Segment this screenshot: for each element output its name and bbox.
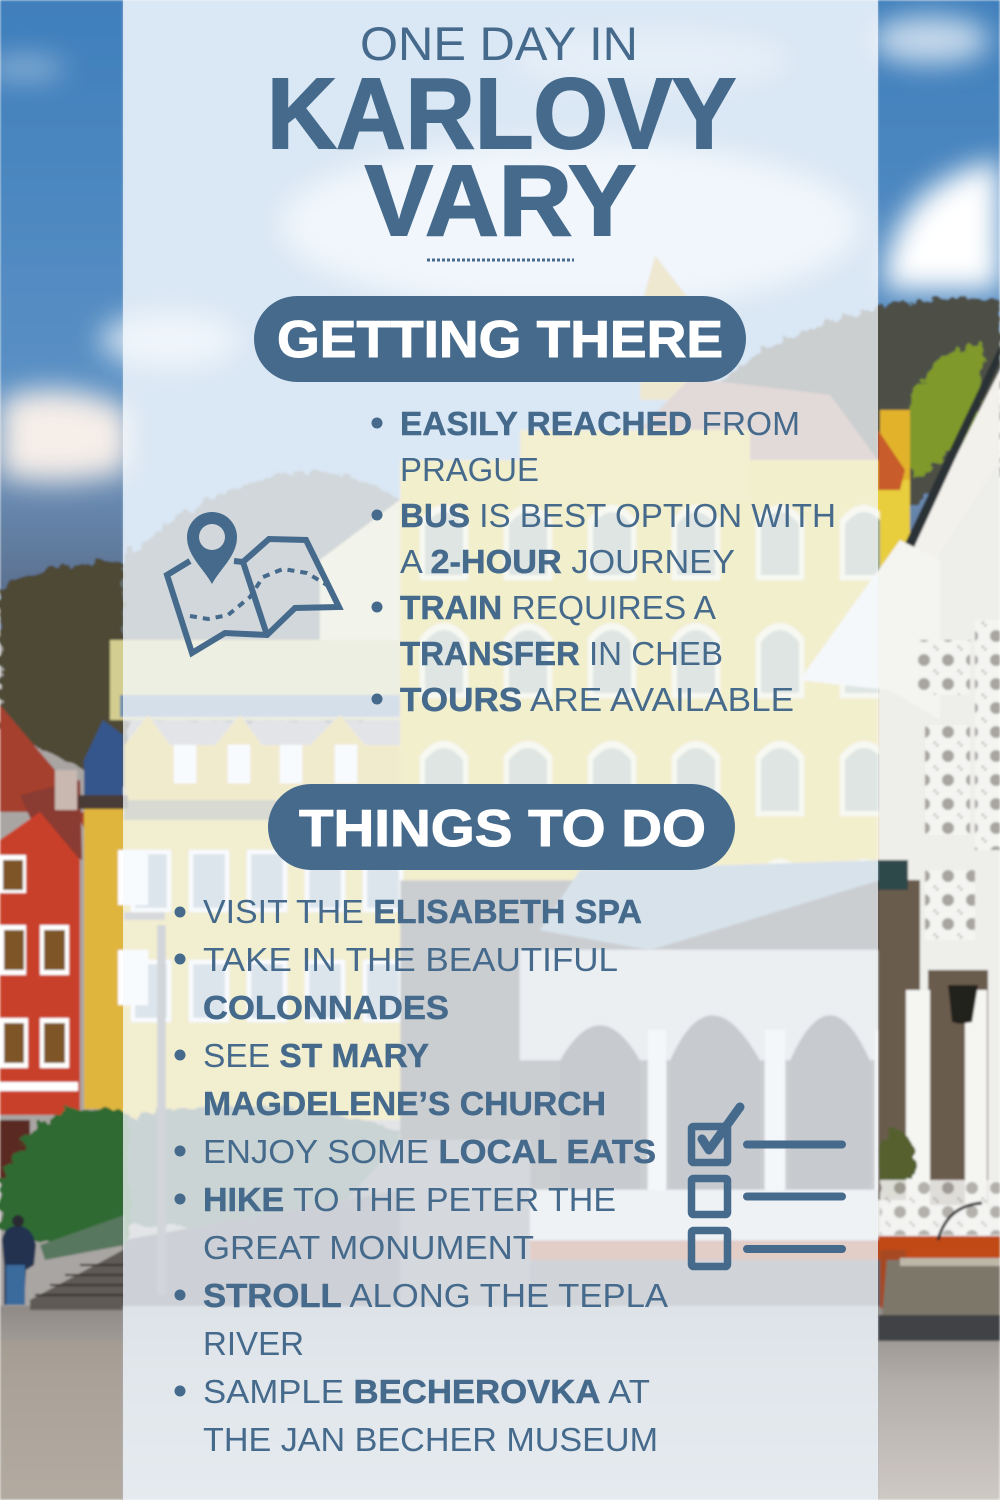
text block: things to do list: RIVER bbox=[203, 1325, 304, 1362]
text block: things to do list: HIKE TO THE PETER THE bbox=[203, 1181, 616, 1218]
trees and stairs lower left bbox=[123, 1104, 400, 1240]
title: VARY bbox=[365, 145, 636, 257]
yellow house bbox=[84, 720, 123, 800]
text block: getting there list: TRANSFER IN CHEB bbox=[400, 635, 723, 672]
text block: things to do list bbox=[174, 893, 668, 1458]
text block: getting there list bbox=[372, 405, 836, 718]
text block: things to do list: SEE ST MARY bbox=[203, 1037, 429, 1074]
person bbox=[2, 1226, 36, 1305]
text block: getting there list: TOURS ARE AVAILABLE bbox=[400, 681, 794, 718]
heading pill: things to do bbox=[268, 784, 735, 870]
text block: things to do list: COLONNADES bbox=[203, 989, 449, 1026]
title bbox=[267, 17, 736, 257]
text block: things to do list: THE JAN BECHER MUSEUM bbox=[203, 1421, 658, 1458]
title: KARLOVY bbox=[267, 58, 736, 170]
pavilion right bbox=[878, 370, 1000, 650]
hills and trees bbox=[0, 298, 1000, 790]
text block: things to do list: MAGDELENE’S CHURCH bbox=[203, 1085, 606, 1122]
text block: getting there list: BUS IS BEST OPTION WITH bbox=[400, 497, 836, 534]
text block: things to do list: ENJOY SOME LOCAL EATS bbox=[203, 1133, 656, 1170]
colonnade bbox=[400, 880, 900, 1310]
text block: things to do list: GREAT MONUMENT bbox=[203, 1229, 534, 1266]
text block: things to do list: VISIT THE ELISABETH SPA bbox=[203, 893, 642, 930]
icon: map with location pin bbox=[167, 512, 339, 653]
upper main building bbox=[640, 255, 690, 400]
left white building bbox=[320, 500, 400, 720]
dotted divider bbox=[427, 258, 574, 262]
text block: getting there list: EASILY REACHED FROM bbox=[400, 405, 800, 442]
text block: things to do list: SAMPLE BECHEROVKA AT bbox=[203, 1373, 650, 1410]
icon: checklist bbox=[692, 1107, 842, 1266]
text block: getting there list: A 2-HOUR JOURNEY bbox=[400, 543, 735, 580]
translucent content panel bbox=[123, 0, 878, 1500]
bushes bbox=[0, 1108, 130, 1245]
text block: things to do list: TAKE IN THE BEAUTIFUL bbox=[203, 941, 618, 978]
text block: getting there list: TRAIN REQUIRES A bbox=[400, 589, 716, 626]
text block: things to do list: STROLL ALONG THE TEPLA bbox=[203, 1277, 668, 1314]
heading pill: getting there bbox=[254, 296, 746, 382]
heading pill: getting there: GETTING THERE bbox=[277, 311, 723, 369]
heading pill: things to do: THINGS TO DO bbox=[299, 800, 706, 858]
title: ONE DAY IN bbox=[360, 17, 638, 70]
text block: getting there list: PRAGUE bbox=[400, 451, 539, 488]
ground bbox=[0, 1306, 1000, 1500]
red house bbox=[0, 705, 85, 830]
